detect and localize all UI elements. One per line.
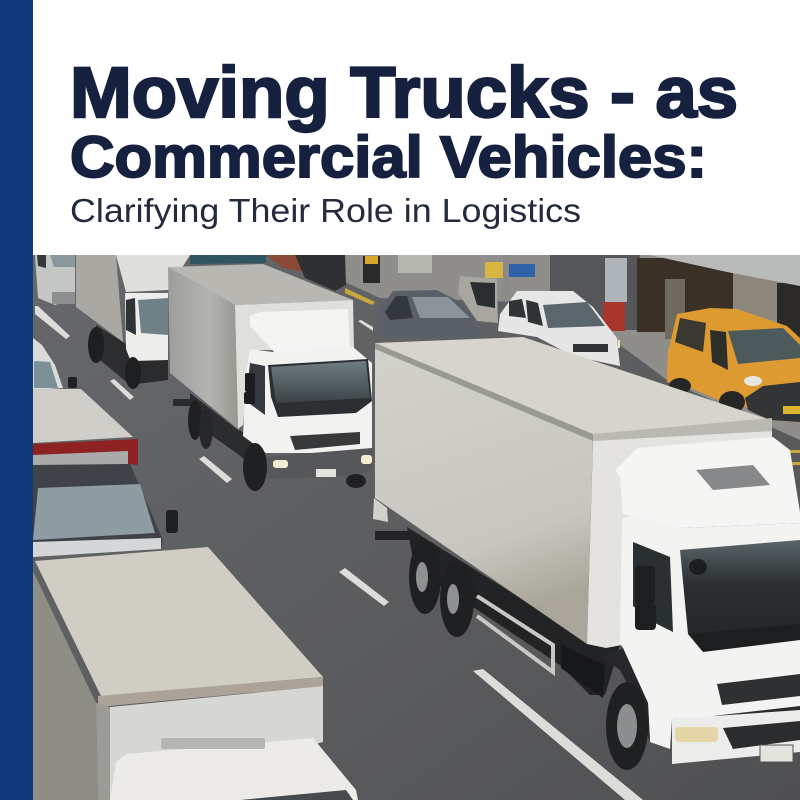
lane markings <box>35 306 643 800</box>
rear bumper <box>375 531 409 540</box>
gray car <box>377 290 482 337</box>
title line 2: Commercial Vehicles: <box>70 125 707 190</box>
van at bottom <box>110 738 358 800</box>
orange van <box>667 308 800 422</box>
truck: middle <box>168 264 372 491</box>
title block <box>70 54 738 229</box>
title line 1: Moving Trucks - as <box>70 54 738 133</box>
subtitle: Clarifying Their Role in Logistics <box>70 192 581 229</box>
bumper <box>263 448 372 479</box>
background sidewalk and buildings <box>345 255 800 465</box>
windshield <box>268 359 372 417</box>
road surface <box>33 255 800 800</box>
small left car <box>33 338 77 390</box>
cab <box>243 347 372 453</box>
front wheel <box>606 682 648 770</box>
fuel tank <box>561 645 605 698</box>
roof vent <box>696 465 770 490</box>
wheels <box>409 540 441 614</box>
cargo side <box>375 343 593 644</box>
windshield <box>680 540 800 650</box>
roof fairing <box>250 309 350 354</box>
van with open door <box>458 276 498 323</box>
roof fairing <box>615 437 800 528</box>
cab body <box>620 514 800 749</box>
grille <box>290 432 360 450</box>
grille <box>717 674 800 705</box>
car behind left truck <box>33 464 178 557</box>
chassis <box>190 393 262 470</box>
mirrors <box>245 373 255 392</box>
photo: road traffic scene <box>33 255 800 800</box>
chassis <box>407 527 620 695</box>
cargo top <box>168 264 353 305</box>
cargo side <box>168 267 238 429</box>
side guard rails <box>477 596 553 672</box>
wheels <box>243 443 267 491</box>
cargo front <box>587 431 772 648</box>
truck: large foreground <box>373 337 800 770</box>
white SUV <box>498 291 620 366</box>
cargo top <box>375 337 770 437</box>
wheel arch <box>603 648 650 742</box>
truck: far left <box>76 255 190 389</box>
door window <box>246 363 265 415</box>
bumper <box>672 710 800 764</box>
cargo front <box>235 300 354 429</box>
truck: left with red band <box>33 389 138 466</box>
truck: bottom left <box>33 547 323 800</box>
left navy bar <box>0 0 33 800</box>
distant vehicles top <box>35 255 346 305</box>
cargo edge rail <box>375 343 593 441</box>
door window <box>633 542 673 632</box>
wing mirrors <box>635 566 655 604</box>
